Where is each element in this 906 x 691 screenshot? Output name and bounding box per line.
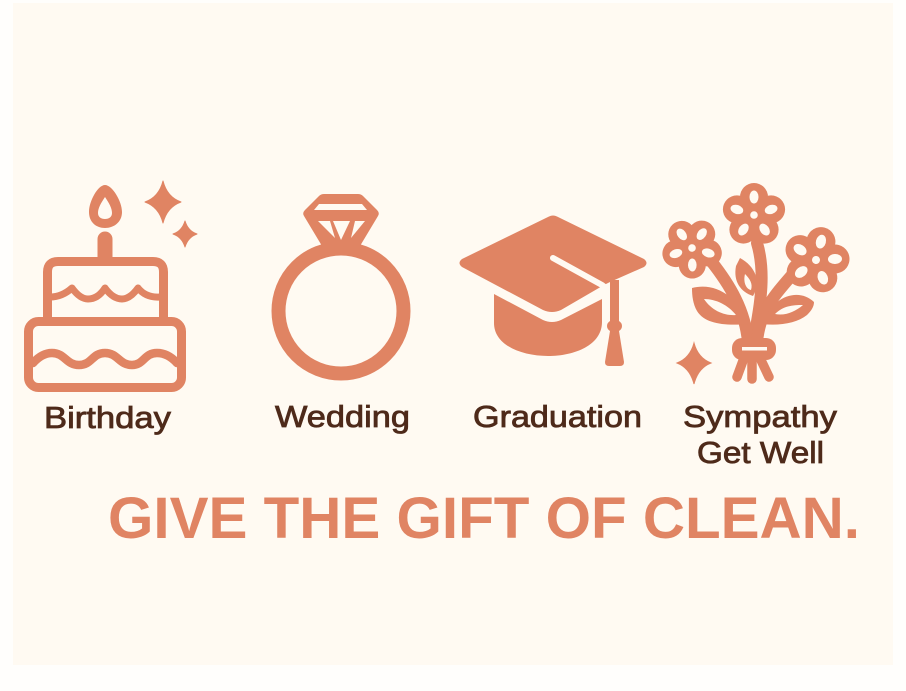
right leaf	[762, 295, 814, 325]
label: Graduation: Graduation	[473, 399, 642, 434]
tassel	[605, 280, 624, 366]
icon: ring	[278, 194, 404, 374]
left leaf	[692, 287, 748, 325]
sparkle small	[173, 221, 197, 247]
label: Wedding: Wedding	[275, 399, 410, 434]
stems	[711, 243, 792, 342]
cap board highlight	[553, 258, 606, 288]
lower tier	[28, 322, 182, 388]
flower right	[777, 219, 856, 297]
sparkle large	[145, 181, 181, 223]
flower left	[652, 206, 734, 287]
icon: graduation cap	[460, 216, 646, 366]
upper tier icing	[50, 288, 160, 299]
middle leaf	[735, 258, 757, 296]
sparkle	[677, 343, 711, 384]
label: Get Well: Get Well	[697, 435, 824, 470]
tagline: GIVE THE GIFT OF CLEAN.	[108, 486, 860, 551]
ribbon slit	[742, 347, 767, 350]
cap base	[494, 294, 602, 356]
cake flame	[89, 185, 122, 228]
diamond facets	[314, 204, 367, 240]
ribbon tails	[737, 358, 769, 379]
diamond	[303, 194, 379, 246]
upper tier	[48, 262, 164, 317]
ribbon binding	[732, 338, 776, 360]
candle	[98, 239, 112, 258]
label: Sympathy: Sympathy	[683, 399, 838, 434]
flower centre	[723, 183, 785, 244]
ring band	[278, 248, 404, 374]
icon: birthday cake	[28, 181, 197, 388]
cap board	[460, 216, 646, 312]
icon: flower bouquet	[652, 183, 856, 384]
lower tier icing	[33, 353, 177, 365]
label: Birthday: Birthday	[44, 400, 172, 435]
